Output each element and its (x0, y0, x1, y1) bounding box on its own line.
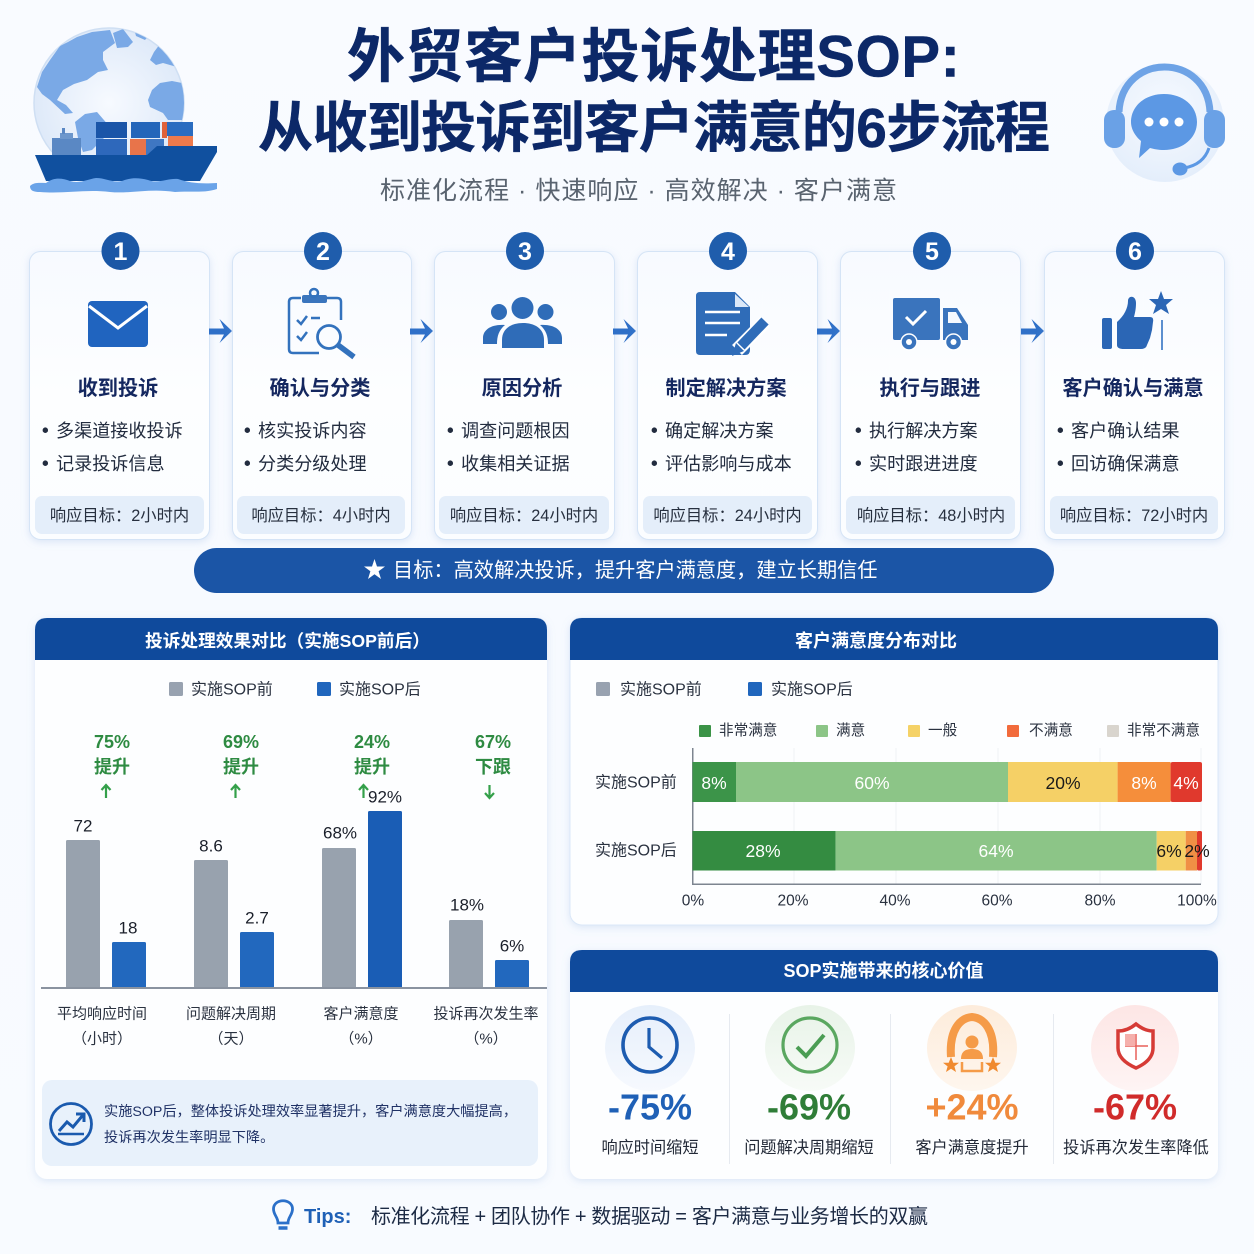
step 4 bullets: 评估影响与成本 (665, 454, 792, 474)
bar chart: 18% (450, 896, 484, 914)
number badge 3: 3 (518, 238, 532, 266)
step 5 response target: 响应目标：48小时内 (857, 506, 1005, 525)
stacked bar chart (595, 748, 1217, 910)
step 1 bullets: 多渠道接收投诉 (56, 421, 183, 441)
step 2 response target (237, 496, 405, 534)
step 4 bullets: 确定解决方案 (665, 421, 774, 441)
icon: trend chart (50, 1104, 92, 1144)
step 1 heading: 收到投诉 (78, 377, 158, 400)
metric: customer satisfaction: +24% (925, 1086, 1019, 1128)
step 4 bullets (651, 420, 792, 474)
bar chart: 6% (500, 936, 524, 956)
arrow 3 to 4 (613, 319, 636, 343)
bar chart: 18 (119, 918, 137, 938)
title: 外贸客户投诉处理SOP: (347, 24, 960, 90)
chart legend: 实施SOP后 (339, 680, 421, 698)
category labels: 问题解决周期 (186, 1006, 276, 1022)
step 6 bullets (1057, 420, 1180, 474)
step 5 heading: 执行与跟进 (880, 377, 980, 400)
step 2 bullets: 分类分级处理 (258, 454, 367, 474)
bar chart: 提升 (354, 756, 390, 777)
tips line: Tips: (304, 1206, 351, 1228)
bar chart: 69% (223, 732, 259, 752)
step 6 bullets: 回访确保满意 (1071, 454, 1180, 474)
metric: resolution cycle: 问题解决周期缩短 (744, 1139, 874, 1157)
series legend (596, 680, 853, 698)
panel header: 投诉处理效果对比（实施SOP前后） (145, 630, 430, 651)
step 3 card (434, 232, 614, 540)
satisfaction legend: 不满意 (1029, 721, 1073, 739)
metric: repeat complaint rate: 投诉再次发生率降低 (1063, 1139, 1209, 1157)
title: 从收到投诉到客户满意的6步流程 (258, 97, 1050, 159)
step 2 response target: 响应目标：4小时内 (251, 506, 391, 525)
icon: clipboard with magnifier (289, 289, 354, 357)
category labels (57, 1004, 539, 1048)
callout (42, 1080, 538, 1166)
icon: star (364, 559, 385, 579)
stacked bar chart: 4% (1173, 773, 1199, 793)
step 6 card (1044, 232, 1224, 540)
metric: response time (601, 1005, 699, 1157)
stacked bar chart: 28% (745, 841, 781, 861)
satisfaction legend: 满意 (836, 721, 865, 739)
metric: repeat complaint rate (1063, 1005, 1209, 1157)
step 1 bullets: • (42, 420, 49, 442)
step 1 bullets: • (42, 454, 49, 474)
category labels: （%） (464, 1030, 508, 1048)
illustration: globe and cargo ship (30, 28, 217, 192)
metric: customer satisfaction (915, 1005, 1029, 1157)
stacked bar chart: 6% (1156, 841, 1182, 861)
bar chart: 72 (74, 816, 92, 836)
bar chart: 92% (368, 788, 402, 806)
step 3 heading: 原因分析 (482, 377, 562, 400)
step 1 response target: 响应目标：2小时内 (50, 506, 189, 525)
arrow 2 to 3 (410, 319, 433, 343)
step 5 bullets: • (855, 420, 862, 442)
stacked bar chart: 8% (1131, 773, 1157, 793)
metric: repeat complaint rate: -67% (1093, 1086, 1177, 1128)
category labels: （天） (208, 1030, 254, 1048)
step 6 bullets: • (1057, 420, 1064, 442)
stacked bar chart: 实施SOP后 (595, 842, 677, 860)
stacked bar chart: 实施SOP前 (595, 774, 677, 792)
step 3 response target: 响应目标：24小时内 (450, 506, 598, 525)
step 1 response target (35, 496, 204, 534)
stacked bar chart: 100% (1177, 892, 1217, 910)
arrow 1 to 2 (209, 319, 232, 343)
step 3 response target (439, 496, 609, 534)
category labels: 平均响应时间 (57, 1004, 147, 1022)
step 1 bullets (42, 420, 183, 474)
category labels: （%） (339, 1030, 383, 1048)
illustration: customer service headset (1104, 64, 1225, 182)
step 3 bullets: 收集相关证据 (461, 454, 570, 474)
goal text: 目标：高效解决投诉，提升客户满意度，建立长期信任 (393, 559, 878, 582)
stacked bar chart: 64% (978, 841, 1014, 861)
metric: customer satisfaction: 客户满意度提升 (915, 1138, 1029, 1157)
bar chart: 8.6 (199, 836, 223, 856)
callout text (104, 1103, 517, 1146)
icon: document with pencil (696, 292, 765, 356)
tips line (274, 1201, 928, 1228)
satisfaction legend: 非常满意 (719, 721, 777, 739)
step 1 card (30, 232, 210, 540)
goal banner (194, 548, 1054, 593)
panel header: SOP实施带来的核心价值 (783, 960, 984, 981)
stacked bar chart: 40% (879, 892, 911, 910)
bar chart: 24% (354, 732, 390, 752)
step 1 bullets: 记录投诉信息 (56, 454, 165, 474)
category labels: （小时） (72, 1030, 132, 1048)
panel header (570, 618, 1218, 660)
icon: light bulb (274, 1201, 292, 1228)
tips line: 标准化流程 + 团队协作 + 数据驱动 = 客户满意与业务增长的双赢 (371, 1205, 928, 1228)
panel header: 客户满意度分布对比 (795, 630, 957, 651)
step 4 bullets: • (651, 454, 658, 474)
step 2 bullets (244, 420, 367, 474)
satisfaction legend: 一般 (928, 722, 958, 739)
step 6 response target (1050, 496, 1218, 534)
satisfaction legend: 非常不满意 (1127, 721, 1200, 739)
stacked bar chart: 0% (682, 892, 704, 910)
category labels: 投诉再次发生率 (433, 1006, 539, 1022)
step 6 bullets: • (1057, 454, 1064, 474)
icon: delivery truck (893, 298, 968, 350)
step 4 heading: 制定解决方案 (665, 376, 787, 400)
metric: response time: -75% (608, 1086, 692, 1128)
step 6 heading: 客户确认与满意 (1062, 376, 1204, 400)
series legend: 实施SOP后 (771, 680, 853, 698)
number badge 6: 6 (1128, 238, 1142, 266)
number badge 1 (102, 232, 140, 270)
series legend: 实施SOP前 (620, 680, 702, 698)
panel: satisfaction distribution (570, 618, 1218, 925)
step 3 bullets: 调查问题根因 (461, 421, 570, 441)
arrow 4 to 5 (817, 319, 840, 343)
bar chart: 提升 (223, 756, 259, 777)
category labels: 客户满意度 (323, 1004, 399, 1022)
arrow 5 to 6 (1021, 319, 1044, 343)
subtitle: 标准化流程 · 快速响应 · 高效解决 · 客户满意 (380, 177, 897, 205)
step 5 bullets: • (855, 454, 862, 474)
number badge 4: 4 (721, 238, 735, 266)
step 2 heading: 确认与分类 (270, 377, 370, 400)
panel header (35, 618, 547, 660)
metric: response time: 响应时间缩短 (601, 1138, 699, 1157)
step 2 bullets: 核实投诉内容 (258, 421, 367, 441)
metric: resolution cycle: -69% (767, 1086, 851, 1128)
bar chart: 提升 (94, 756, 130, 777)
icon: envelope (88, 301, 148, 347)
number badge 3 (506, 232, 544, 270)
callout text: 实施SOP后，整体投诉处理效率显著提升，客户满意度大幅提高， (104, 1103, 517, 1120)
icon: three people (483, 297, 562, 348)
step 5 response target (846, 496, 1015, 534)
step 2 bullets: • (244, 420, 251, 442)
stacked bar chart: 8% (701, 773, 727, 793)
bar chart: 下跟 (475, 757, 511, 777)
step 4 response target (643, 496, 812, 534)
bar chart: 67% (475, 732, 511, 752)
step 4 card (638, 232, 818, 540)
step 2 bullets: • (244, 454, 251, 474)
bar chart (41, 732, 547, 989)
number badge 5 (913, 232, 951, 270)
bar chart: 68% (323, 824, 357, 842)
title (258, 24, 1050, 159)
number badge 4 (709, 232, 747, 270)
bar chart: 75% (94, 732, 130, 752)
chart legend: 实施SOP前 (191, 680, 273, 698)
metric: resolution cycle (744, 1005, 874, 1157)
bar chart: 2.7 (245, 908, 269, 928)
step 3 bullets: • (447, 454, 454, 474)
step 5 bullets: 执行解决方案 (869, 421, 978, 441)
step 3 bullets (447, 420, 570, 474)
satisfaction legend (699, 721, 1200, 739)
panel: core value of SOP (570, 950, 1218, 1179)
number badge 2 (304, 232, 342, 270)
chart legend (169, 680, 421, 698)
step 3 bullets: • (447, 420, 454, 442)
icon: thumbs up with star (1102, 291, 1173, 350)
step 5 card (840, 232, 1020, 540)
step 6 bullets: 客户确认结果 (1071, 421, 1180, 441)
number badge 1: 1 (114, 238, 128, 266)
number badge 6 (1116, 232, 1154, 270)
callout text: 投诉再次发生率明显下降。 (104, 1129, 274, 1146)
stacked bar chart: 80% (1084, 892, 1116, 910)
step 4 bullets: • (651, 420, 658, 442)
number badge 2: 2 (316, 238, 330, 266)
step 2 card (232, 232, 412, 540)
stacked bar chart: 20% (777, 892, 809, 910)
stacked bar chart: 60% (854, 773, 890, 793)
stacked bar chart: 60% (981, 892, 1013, 910)
panel: complaint handling comparison (35, 618, 547, 1179)
step 5 bullets (855, 420, 978, 474)
step 4 response target: 响应目标：24小时内 (653, 506, 802, 525)
stacked bar chart: 20% (1045, 773, 1081, 793)
step 6 response target: 响应目标：72小时内 (1060, 506, 1208, 525)
stacked bar chart: 2% (1184, 841, 1210, 861)
step 5 bullets: 实时跟进进度 (869, 454, 978, 474)
number badge 5: 5 (925, 238, 939, 266)
panel header (570, 950, 1218, 992)
